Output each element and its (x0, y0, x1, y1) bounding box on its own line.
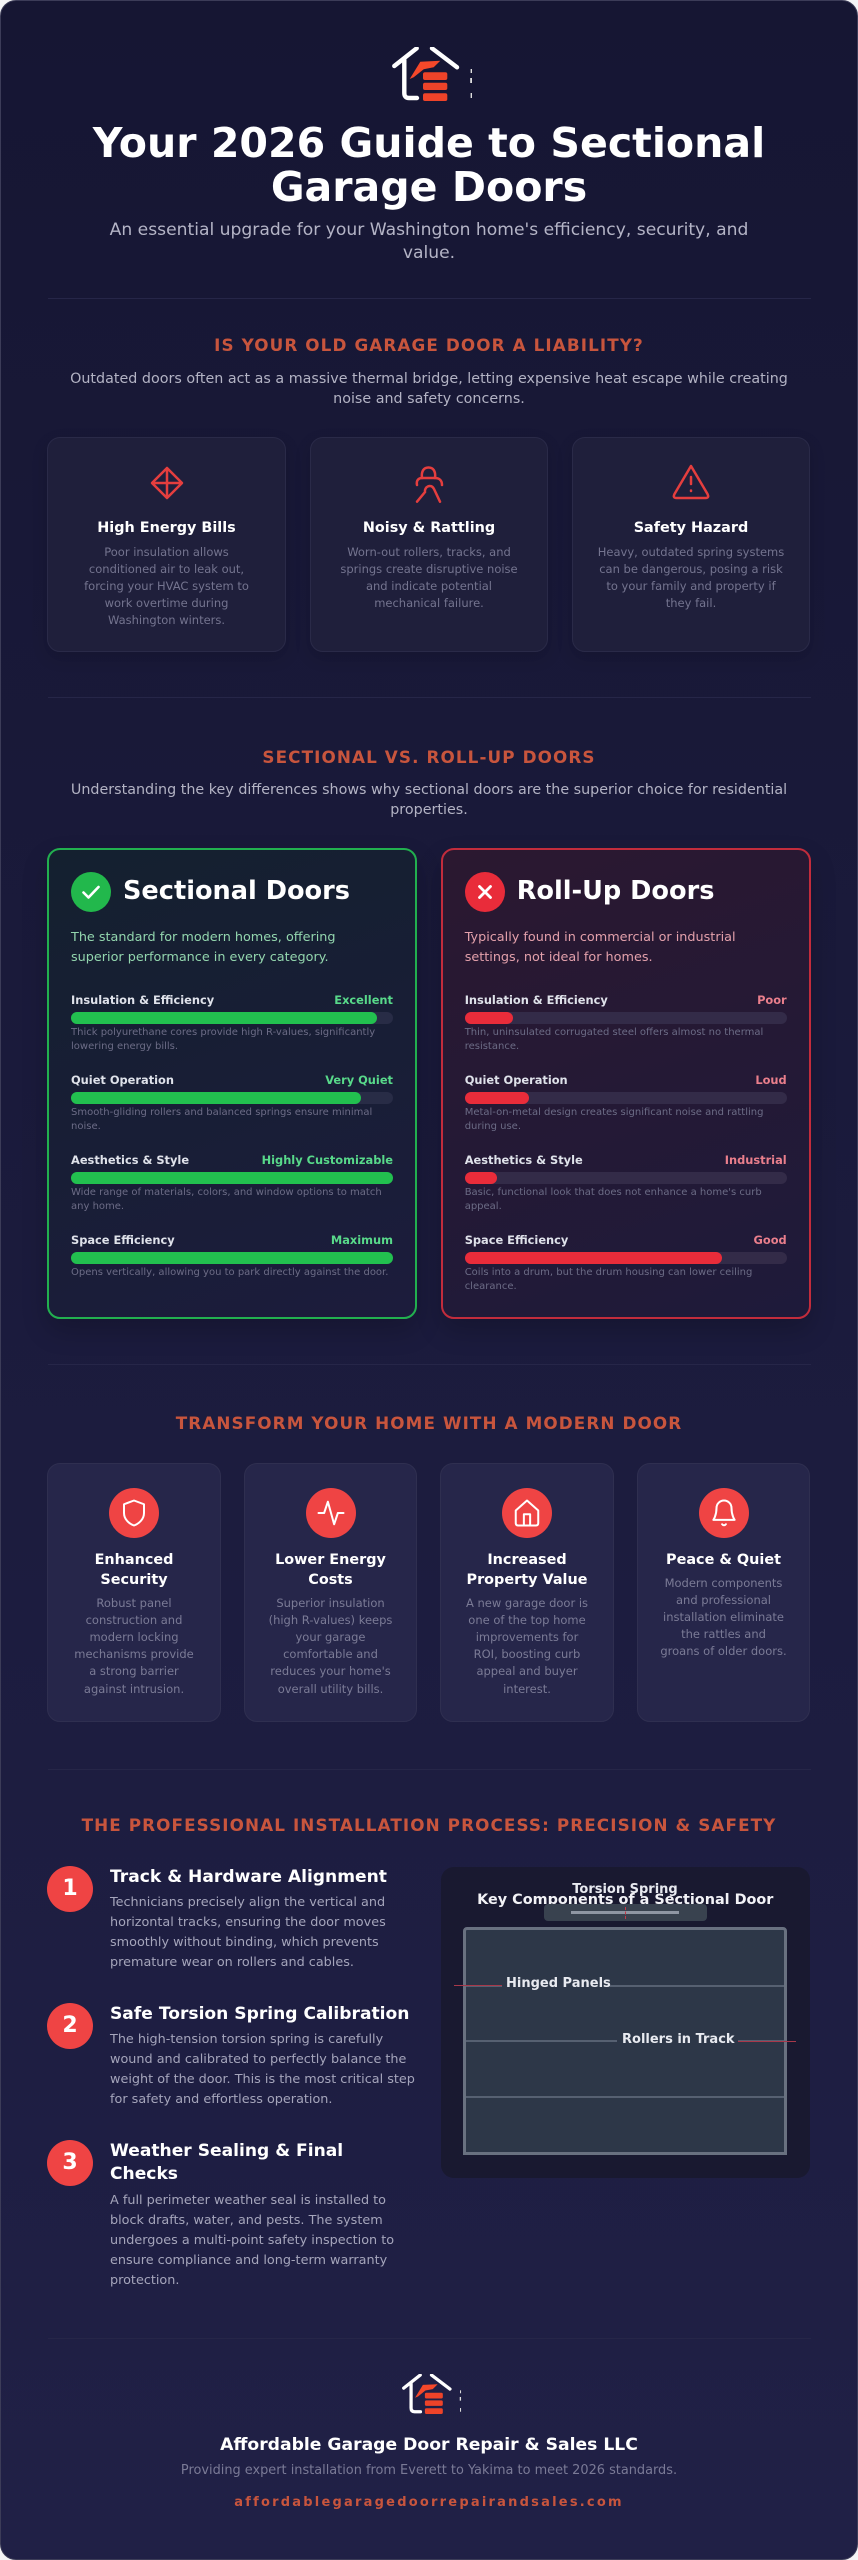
card title: Increased (487, 1552, 567, 1568)
card title: Security (100, 1572, 168, 1588)
section: installation process (47, 1815, 810, 2288)
heading: IS YOUR OLD GARAGE DOOR A LIABILITY? (214, 335, 644, 355)
step title (110, 2140, 343, 2184)
metric: insulation: Excellent (334, 993, 393, 1007)
metric: space (465, 1233, 787, 1292)
card text: construction and (86, 1613, 182, 1627)
metric: aesthetics: Basic, functional look that does not enhance a home's curb (465, 1187, 762, 1198)
card text: springs create disruptive noise (340, 562, 518, 576)
metric: insulation (71, 993, 393, 1052)
card title (275, 1552, 386, 1588)
panel text: settings, not ideal for homes. (465, 950, 653, 965)
card text: the rattles and (681, 1627, 766, 1641)
panel title: Roll-Up Doors (517, 876, 714, 906)
card text (269, 1596, 392, 1696)
icon: check (71, 872, 111, 912)
metric: aesthetics: Aesthetics & Style (71, 1153, 189, 1167)
metric: insulation: resistance. (465, 1041, 519, 1052)
card: safety (572, 437, 810, 652)
metric: aesthetics: Industrial (725, 1153, 787, 1167)
metric: quiet: Quiet Operation (71, 1073, 174, 1087)
panel: sectional doors (47, 848, 417, 1319)
step text: smoothly without binding, which prevents (110, 1935, 379, 1950)
metric: quiet: noise. (71, 1121, 101, 1132)
card: energy (244, 1463, 417, 1722)
icon: rattling (416, 466, 444, 503)
card text: mechanisms provide (74, 1647, 194, 1661)
card text: against intrusion. (84, 1682, 184, 1696)
card title: Safety Hazard (634, 520, 748, 536)
panel text: The standard for modern homes, offering (71, 930, 336, 945)
company name: Affordable Garage Door Repair & Sales LLC (220, 2435, 638, 2455)
intro text: Understanding the key differences shows why sectional doors are the superior choice for residential (71, 782, 787, 798)
panel title: Sectional Doors (123, 876, 350, 906)
tagline: Providing expert installation from Everett to Yakima to meet 2026 standards. (181, 2463, 677, 2478)
number badge (47, 1866, 93, 1912)
pointer: hinged panels (454, 1984, 502, 1986)
step 1 (47, 1866, 387, 1970)
icon: warning triangle (672, 464, 710, 500)
metric: insulation (464, 993, 787, 1052)
card text: Heavy, outdated spring systems (598, 544, 784, 558)
card text: Modern components (665, 1576, 782, 1590)
metric: quiet (465, 1073, 787, 1132)
card text: and professional (676, 1593, 771, 1607)
step 3 (47, 2140, 394, 2288)
card text: work overtime during (105, 596, 228, 610)
metric: aesthetics: Aesthetics & Style (465, 1153, 583, 1167)
metric: space: Maximum (331, 1233, 393, 1247)
metric: insulation: lowering energy bills. (71, 1041, 178, 1052)
card text: can be dangerous, posing a risk (599, 562, 783, 576)
card text: and indicate potential (366, 579, 492, 593)
title (92, 119, 765, 211)
icon: house (502, 1488, 552, 1538)
step text: weight of the door. This is the most critical step (110, 2072, 415, 2087)
card text: installation eliminate (663, 1610, 784, 1624)
metric: quiet: Loud (755, 1073, 787, 1087)
card title: Property Value (467, 1572, 587, 1588)
metric: space: Space Efficiency (71, 1233, 175, 1247)
label: rollers in track (617, 2030, 738, 2050)
card title (95, 1552, 173, 1588)
metric: insulation: Thin, uninsulated corrugated steel offers almost no thermal (465, 1027, 763, 1038)
footer logo (402, 2374, 464, 2416)
card text: improvements for (476, 1630, 578, 1644)
card title: Noisy & Rattling (363, 520, 495, 536)
step text (110, 1895, 386, 1970)
step title: Track & Hardware Alignment (110, 1866, 387, 1886)
metric: aesthetics: any home. (71, 1201, 124, 1212)
panel text: superior performance in every category. (71, 950, 329, 965)
metric: quiet: Metal-on-metal design creates significant noise and rattling (465, 1107, 763, 1118)
icon: bell (698, 1488, 748, 1538)
metric: space: Good (754, 1233, 787, 1247)
card text: A new garage door is (466, 1596, 588, 1610)
card text (74, 1596, 194, 1696)
label: rollers in track: Rollers in Track (622, 2032, 735, 2047)
metric: aesthetics (71, 1153, 393, 1212)
metric: space: Opens vertically, allowing you to park directly against the door. (71, 1267, 388, 1278)
icon: diamond (150, 466, 184, 500)
card: noisy (310, 437, 548, 652)
title: Garage Doors (271, 163, 587, 211)
metric: insulation: Insulation & Efficiency (465, 993, 608, 1007)
metric: quiet (71, 1073, 393, 1132)
card: value (440, 1463, 614, 1722)
intro text: Outdated doors often act as a massive thermal bridge, letting expensive heat escape while creating (70, 370, 788, 386)
card title: High Energy Bills (97, 520, 236, 536)
icon: cross (465, 872, 505, 912)
metric: space: Space Efficiency (465, 1233, 568, 1247)
metric: insulation: Insulation & Efficiency (71, 993, 214, 1007)
card text: reduces your home's (270, 1664, 391, 1678)
metric: insulation: Poor (757, 993, 787, 1007)
door (463, 1927, 787, 2155)
step title: Checks (110, 2164, 178, 2184)
step text: Technicians precisely align the vertical and (110, 1895, 385, 1910)
metric: quiet: Quiet Operation (465, 1073, 568, 1087)
intro text: noise and safety concerns. (333, 390, 525, 406)
metric: aesthetics (464, 1153, 787, 1212)
step text: for safety and effortless operation. (110, 2092, 332, 2107)
card text: Superior insulation (276, 1596, 385, 1610)
heading: TRANSFORM YOUR HOME WITH A MODERN DOOR (176, 1413, 682, 1433)
diagram title: Key Components of a Sectional Door (477, 1892, 773, 1908)
step text: wound and calibrated to perfectly balance the (110, 2052, 406, 2067)
card title: Costs (308, 1572, 353, 1588)
footer (0, 2339, 858, 2560)
card text (340, 544, 518, 610)
icon: pulse (306, 1488, 356, 1538)
diagram: key components (440, 1867, 810, 2178)
metric: aesthetics: Wide range of materials, colors, and window options to match (71, 1187, 382, 1198)
intro text (71, 782, 787, 818)
label: torsion spring: Torsion Spring (572, 1882, 678, 1897)
card text (84, 544, 249, 627)
card title: Peace & Quiet (666, 1552, 781, 1568)
header section (92, 47, 765, 262)
heading: THE PROFESSIONAL INSTALLATION PROCESS: PRECISION & SAFETY (82, 1815, 776, 1835)
step title: Safe Torsion Spring Calibration (110, 2004, 409, 2024)
card text: appeal and buyer (476, 1664, 578, 1678)
card text (660, 1576, 787, 1658)
metric: aesthetics: appeal. (465, 1201, 502, 1212)
subtitle (110, 220, 748, 262)
card text: modern locking (89, 1630, 179, 1644)
card text: your garage (295, 1630, 366, 1644)
metric: space (71, 1233, 393, 1278)
step text (110, 2193, 394, 2288)
step text (110, 2032, 415, 2107)
card text: Robust panel (96, 1596, 172, 1610)
logo (392, 47, 472, 101)
card text: overall utility bills. (278, 1682, 383, 1696)
card text (466, 1596, 588, 1696)
section: comparison (47, 747, 811, 1326)
metric: quiet: during use. (465, 1121, 521, 1132)
metric: space: clearance. (465, 1281, 517, 1292)
panel: roll-up doors (441, 848, 811, 1319)
panel text: Typically found in commercial or industrial (465, 930, 736, 945)
section: benefits (47, 1413, 810, 1722)
metric: space: Coils into a drum, but the drum housing can lower ceiling (465, 1267, 752, 1278)
icon: shield (109, 1488, 159, 1538)
metric: quiet: Smooth-gliding rollers and balanced springs ensure minimal (71, 1107, 372, 1118)
card title: Lower Energy (275, 1552, 386, 1568)
card title: Enhanced (95, 1552, 173, 1568)
card text: Washington winters. (108, 613, 225, 627)
step text: premature wear on rollers and cables. (110, 1955, 354, 1970)
card: quiet (637, 1463, 810, 1722)
subtitle: An essential upgrade for your Washington home's efficiency, security, and (110, 220, 748, 240)
step text: A full perimeter weather seal is installed to (110, 2193, 386, 2208)
metric: aesthetics: Highly Customizable (262, 1153, 393, 1167)
number badge: 2 (62, 2013, 78, 2038)
step 2 (47, 2003, 415, 2107)
card text: Worn-out rollers, tracks, and (347, 544, 511, 558)
card: security (47, 1463, 221, 1722)
card text: ROI, boosting curb (474, 1647, 580, 1661)
card text: forcing your HVAC system to (84, 579, 249, 593)
metric: quiet: Very Quiet (325, 1073, 393, 1087)
spring housing (544, 1904, 707, 1921)
panel text (70, 930, 336, 965)
step text: ensure compliance and long-term warranty (110, 2253, 387, 2268)
card text: to your family and property if (606, 579, 776, 593)
intro text (70, 370, 788, 406)
card: high energy bills (47, 437, 286, 652)
step text: horizontal tracks, ensuring the door moves (110, 1915, 386, 1930)
number badge: 1 (62, 1876, 78, 1901)
step text: block drafts, water, and pests. The system (110, 2213, 383, 2228)
step text: The high-tension torsion spring is carefully (110, 2032, 383, 2047)
card text: one of the top home (468, 1613, 586, 1627)
card text: comfortable and (283, 1647, 378, 1661)
card text: Poor insulation allows (104, 544, 229, 558)
intro text: properties. (390, 802, 468, 818)
card text: (high R-values) keeps (269, 1613, 392, 1627)
step text: protection. (110, 2273, 179, 2288)
title: Your 2026 Guide to Sectional (93, 119, 765, 167)
step text: undergoes a multi-point safety inspection to (110, 2233, 394, 2248)
step title: Weather Sealing & Final (110, 2140, 343, 2160)
card text: groans of older doors. (660, 1644, 787, 1658)
metric: insulation: Thick polyurethane cores provide high R-values, significantly (71, 1027, 375, 1038)
subtitle: value. (403, 242, 455, 262)
card text (598, 544, 784, 610)
card text: mechanical failure. (374, 596, 484, 610)
pointer: rollers (738, 2040, 796, 2042)
card text: interest. (503, 1682, 551, 1696)
website: affordablegaragedoorrepairandsales.com (234, 2495, 624, 2510)
card text: they fail. (666, 596, 716, 610)
card text: a strong barrier (89, 1664, 179, 1678)
number badge: 3 (62, 2150, 78, 2175)
section: liability (47, 335, 810, 652)
card title (467, 1552, 587, 1588)
panel text (464, 930, 736, 965)
label: hinged panels: Hinged Panels (506, 1976, 611, 1991)
card text: conditioned air to leak out, (89, 562, 244, 576)
heading: SECTIONAL VS. ROLL-UP DOORS (262, 747, 596, 767)
number badge (47, 2003, 93, 2049)
number badge (47, 2140, 93, 2186)
